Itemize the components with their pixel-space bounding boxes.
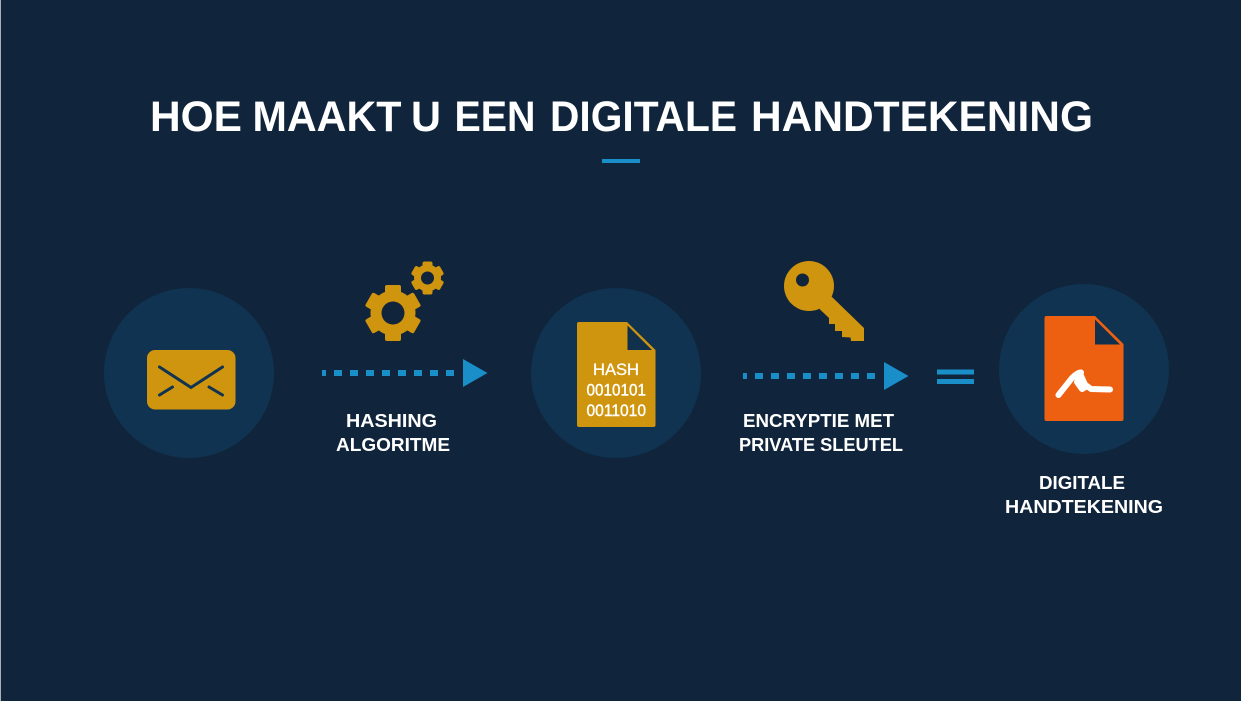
icon: hash document: 0011010 [586, 402, 646, 420]
label: digitale handtekening: HANDTEKENING [1005, 496, 1163, 517]
label: encryptie met private sleutel [739, 410, 903, 455]
title: U [411, 94, 441, 141]
icon: hash document: 0010101 [586, 382, 646, 400]
icon: key [784, 261, 864, 341]
title: EEN [454, 94, 536, 141]
label: hashing algoritme: ALGORITME [336, 434, 450, 455]
label: hashing algoritme [336, 410, 450, 455]
title: HANDTEKENING [751, 94, 1093, 141]
step: digital signature [999, 284, 1169, 454]
step: hash [531, 288, 701, 458]
label: digitale handtekening [1005, 472, 1163, 517]
icon: hash document: HASH [593, 361, 639, 379]
title: HOE [150, 94, 242, 141]
icon: hash document [577, 322, 656, 427]
arrow: encryption [743, 362, 908, 390]
step: message [104, 288, 274, 458]
icon: equals sign [937, 370, 974, 384]
title: DIGITALE [550, 94, 737, 141]
title: MAAKT [252, 94, 402, 141]
icon: envelope [147, 350, 236, 410]
label: hashing algoritme: HASHING [346, 410, 437, 431]
arrow: hashing [322, 359, 488, 387]
icon: signed document [1044, 316, 1124, 421]
label: encryptie met private sleutel: PRIVATE SLEUTEL [739, 434, 903, 455]
title [150, 94, 1093, 141]
label: encryptie met private sleutel: ENCRYPTIE MET [743, 410, 895, 431]
label: digitale handtekening: DIGITALE [1039, 472, 1125, 493]
icon: gears [365, 262, 444, 341]
